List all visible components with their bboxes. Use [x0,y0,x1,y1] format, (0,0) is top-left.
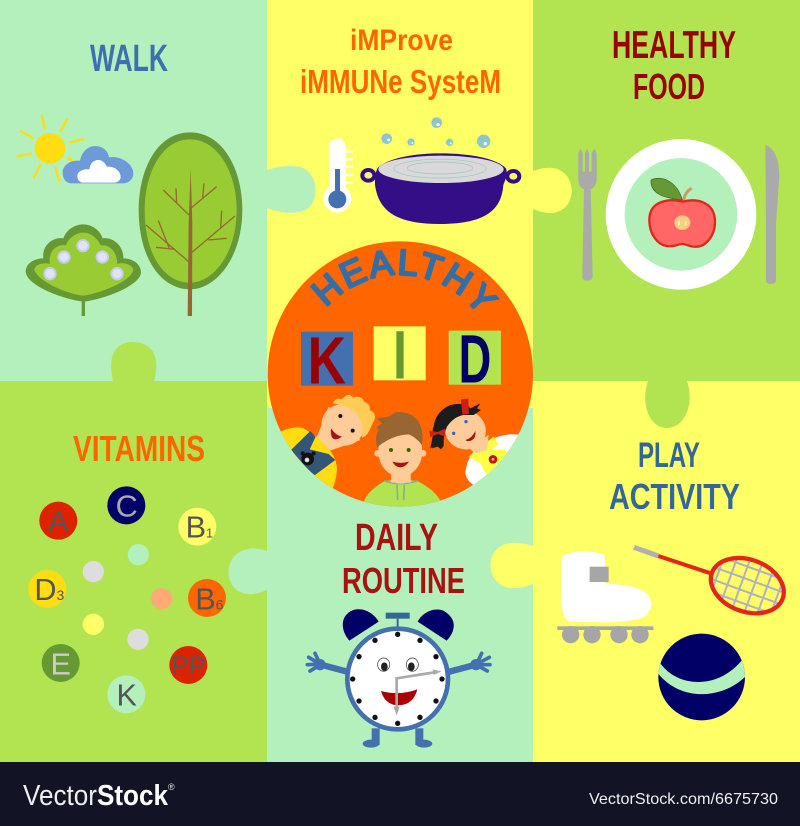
title: healthy: HEALTHY [612,24,736,67]
vitamin C [107,486,145,524]
vitamin B6 [188,579,226,617]
kid: middle boy [363,412,442,507]
vitamin PP [169,646,207,684]
vitamin E [42,644,80,682]
vitamin B6: B6 [195,582,224,616]
title: walk: WALK [90,38,168,80]
puzzle tab: green into play panel [645,381,690,428]
icon: roller skate [557,552,653,643]
kid tile: K: K [308,324,346,398]
icon: alarm clock character [307,609,490,748]
vitamin K: K [116,678,137,712]
puzzle tab: mint into vitamins panel [228,548,267,594]
kid tile: I: I [393,317,407,393]
panel: play activity background [533,381,800,762]
walk illustration [17,115,242,316]
immune and food illustration [323,117,779,290]
vitamin A [39,502,77,540]
icon: sun [17,115,84,182]
vitamin E: E [50,647,71,681]
title: activity: ACTIVITY [609,476,740,517]
kid tile: I [374,317,426,393]
title: immune system: iMMUNe SysteM [300,63,501,100]
vitamins chart [28,486,226,713]
icon: flowering bush [26,224,141,316]
vitamin A: A [48,505,69,539]
kid: right girl [429,399,520,488]
footer bar [0,762,800,826]
badge title: healthy: HEALTHY [310,248,500,310]
hour dots [350,632,445,726]
puzzle tab: green into walk panel [111,342,156,381]
kid: left boy [280,394,375,488]
badge circle [268,241,533,507]
icon: tennis racket [633,545,786,616]
title: vitamins: VITAMINS [73,428,205,469]
panel: vitamins background [0,381,267,762]
vitamin K [107,675,145,713]
icon: ball [657,634,750,720]
icon: cloud [63,146,133,183]
clock arms [307,653,490,672]
kid tile: D: D [459,322,491,398]
small dots [83,544,172,650]
clock mouth [381,689,417,705]
icon: apple [649,178,715,247]
title: food: FOOD [633,66,705,107]
icon: bubbles [381,117,490,148]
icon: thermometer [323,138,353,213]
puzzle tab: yellow into routine panel [490,543,533,588]
panel: healthy food background [533,0,800,381]
title: play: PLAY [638,436,700,475]
central badge [267,241,533,507]
vitamin C: C [116,489,138,523]
icon: cooking pot [362,153,519,224]
title: daily: DAILY [355,517,438,559]
play illustration [557,544,795,720]
panel: walk background [0,0,267,381]
icon: tall tree [139,132,242,316]
vitamin PP: PP [172,652,206,680]
clock face [347,629,448,729]
clock feet [363,728,432,748]
clock eyes [378,658,418,671]
icon: fork [578,148,597,281]
title: routine: ROUTINE [342,560,465,601]
footer url: VectorStock.com/6675730 [589,791,778,808]
puzzle tab: mint into immune panel [267,166,316,213]
vitamin B1: B1 [186,511,213,545]
clock hands [394,669,442,716]
clock bells [343,609,454,641]
icon: knife [765,145,779,284]
footer registered mark: ® [168,782,175,792]
panel: daily routine background [267,408,533,762]
icon: plate [606,139,756,290]
title: improve: iMProve [350,24,453,57]
vitamin D3: D3 [34,573,65,607]
vitamin B1 [178,508,216,546]
panel: immune system background [267,0,533,408]
puzzle tab: yellow into food panel [533,168,572,213]
kids group [267,395,520,507]
footer logo: VectorStock [23,780,169,812]
